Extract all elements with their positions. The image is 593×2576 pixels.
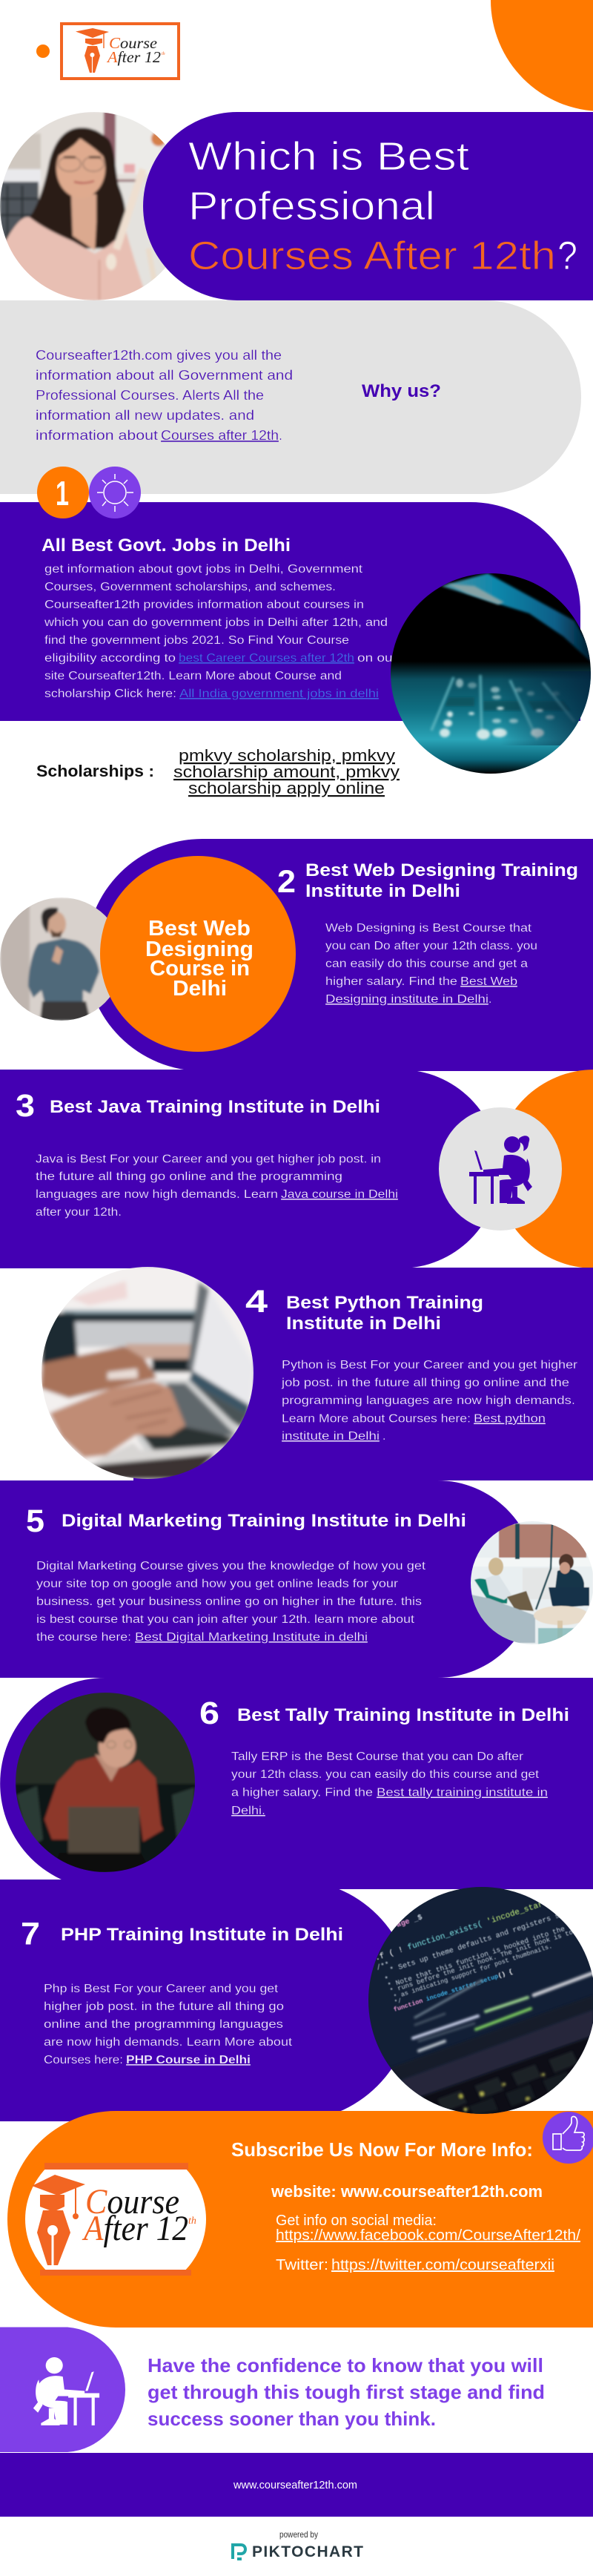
intro text <box>36 348 293 443</box>
body text: higher job post. in the future all thing go <box>44 2000 284 2013</box>
logo: Course After 12th: Course <box>109 34 157 52</box>
intro text: information about <box>36 428 158 443</box>
code text: * runs before the init hook. The init hook is too late <box>389 1921 593 1995</box>
body text: are now high demands. Learn More about <box>44 2036 293 2049</box>
photo: hands typing on laptop <box>41 1265 256 1483</box>
code text: */ <box>394 1997 402 2006</box>
code text: * <box>384 1975 391 1985</box>
why us label: Why us? <box>362 381 441 401</box>
photo: glowing laptop keyboard <box>391 573 593 774</box>
subscribe heading: Subscribe Us Now For More Info: <box>231 2138 533 2161</box>
photo: woman with laptop <box>15 1691 196 1874</box>
body text: Php is Best For your Career and you get <box>44 1983 279 1995</box>
panel: php <box>0 1880 413 2121</box>
decorative orange circle right <box>495 1070 593 1268</box>
cap and nib <box>32 2175 85 2265</box>
heading <box>286 1293 483 1334</box>
confidence message: get through this tough first stage and find <box>148 2381 545 2403</box>
orange dot <box>36 45 50 58</box>
body text: Java is Best For your Career and you get higher job post. in <box>36 1153 381 1166</box>
icon: light sun <box>89 467 141 518</box>
body text: job post. in the future all thing go online and the <box>281 1377 569 1389</box>
panel: digital marketing <box>0 1480 536 1678</box>
logo: large Course After 12th: After 12 <box>82 2209 188 2248</box>
body text: your 12th class. you can easily do this course and get <box>231 1768 540 1781</box>
code text: * Sets up theme defaults and registers support <box>389 1903 586 1975</box>
heading: All Best Govt. Jobs in Delhi <box>42 536 291 556</box>
panel: hero title <box>143 112 593 300</box>
circle caption: Course in <box>150 957 250 981</box>
code text: * Note that this function is hooked into the after <box>387 1917 590 1990</box>
website: website: www.courseafter12th.com <box>271 2182 543 2201</box>
confidence message: success sooner than you think. <box>148 2408 436 2430</box>
panel: confidence <box>0 2328 125 2452</box>
body text: . <box>382 1430 385 1443</box>
circle caption: Designing <box>145 938 254 961</box>
intro text: . <box>279 428 282 443</box>
body text: on our <box>357 652 398 665</box>
question mark: ? <box>557 234 577 278</box>
body text: Tally ERP is the Best Course that you can Do after <box>231 1750 524 1763</box>
logo: Course After 12th: th <box>162 52 165 56</box>
title line 3: Courses After 12th <box>188 234 556 278</box>
number 4: 4 <box>245 1284 268 1320</box>
panel: python <box>133 1268 593 1480</box>
scholarships links: scholarship apply online <box>188 779 385 797</box>
body text: institute in Delhi <box>282 1430 380 1443</box>
confidence message: Have the confidence to know that you will <box>148 2354 543 2376</box>
heading <box>305 860 578 901</box>
piktochart wordmark: PIKTOCHART <box>252 2543 363 2560</box>
body text: you can Do after your 12th class. you <box>325 940 537 952</box>
code text: function incode_starter_setup() { <box>393 1968 514 2014</box>
body text <box>281 1359 578 1443</box>
scholarships links: scholarship amount, pmkvy <box>173 762 400 781</box>
circle caption: Delhi <box>173 977 227 1001</box>
photo: man in denim shirt <box>0 897 110 1021</box>
body text: Courseafter12th provides information about courses in <box>44 599 364 611</box>
body text: eligibility according to <box>44 652 176 665</box>
icon: woman at desk <box>469 1136 532 1204</box>
body text: Python is Best For your Career and you get higher <box>282 1359 578 1371</box>
code text <box>377 1903 573 2012</box>
icon: piktochart mark <box>233 2545 245 2559</box>
number badge 1 <box>37 467 89 518</box>
logo: large Course After 12th <box>25 2163 206 2276</box>
body text: Delhi. <box>231 1805 265 1817</box>
heading: Institute in Delhi <box>305 881 460 901</box>
body text: Best Web <box>460 975 517 988</box>
panel: govt jobs <box>0 502 580 721</box>
number 5: 5 <box>26 1503 44 1539</box>
body text: can easily do this course and get a <box>325 958 528 970</box>
body text: higher salary. Find the <box>325 975 457 988</box>
intro text: Courseafter12th.com gives you all the <box>36 348 282 363</box>
body text: find the government jobs 2021. So Find Your Course <box>44 634 349 647</box>
number 3: 3 <box>16 1088 35 1124</box>
logo: Course After 12th <box>62 24 179 79</box>
panel: subscribe <box>7 2111 593 2328</box>
number 7: 7 <box>21 1917 40 1952</box>
decorative orange circle top right <box>491 0 593 111</box>
scholarships label: Scholarships : <box>36 762 154 780</box>
logo: Course After 12th: After 12 <box>106 48 162 66</box>
code text: age _$ <box>396 1913 424 1930</box>
heading: Best Java Training Institute in Delhi <box>50 1097 380 1117</box>
twitter: Twitter: <box>276 2257 328 2273</box>
body text: the future all thing go online and the programming <box>36 1170 342 1183</box>
social label: Get info on social media: <box>276 2213 437 2229</box>
scholarships links <box>173 746 400 797</box>
code text: .f ( ! function_exists( 'incode_starter_setup <box>374 1887 586 1963</box>
heading: Institute in Delhi <box>286 1314 441 1334</box>
body text: best Career Courses after 12th <box>179 652 354 665</box>
intro text: Professional Courses. Alerts All the <box>36 388 264 403</box>
body text: PHP Course in Delhi <box>126 2054 251 2066</box>
body text: scholarship Click here: <box>44 688 176 700</box>
body text: programming languages are now high demands. <box>282 1394 575 1407</box>
body text: Courses here: <box>44 2054 123 2066</box>
footer band <box>0 2453 593 2517</box>
code text: * as indicating support for post thumbnails. <box>393 1943 553 2001</box>
body text: . <box>488 993 491 1006</box>
title line 1: Which is Best <box>188 134 469 179</box>
photo: code on laptop screen <box>368 1887 593 2115</box>
body text: Java course in Delhi <box>281 1188 398 1201</box>
body text: which you can do government jobs in Delhi after 12th, and <box>44 616 388 629</box>
body text: online and the programming languages <box>44 2018 283 2031</box>
panel: java <box>0 1070 500 1268</box>
body text: is best course that you can join after your 12th. learn more about <box>36 1613 415 1626</box>
body text <box>231 1750 548 1817</box>
body text <box>36 1153 398 1219</box>
gray icon circle <box>439 1107 562 1231</box>
photo: two women in lounge <box>471 1521 593 1644</box>
body text: Best Digital Marketing Institute in delhi <box>135 1631 368 1644</box>
logo: large Course After 12th: th <box>188 2216 196 2227</box>
panel: web designing <box>86 839 593 1071</box>
body text <box>36 1560 426 1644</box>
body text: business. get your business online go on higher in the future. this <box>36 1595 422 1608</box>
intro text: Courses after 12th <box>161 428 279 443</box>
title line 2: Professional <box>188 184 435 228</box>
body text: Web Designing is Best Course that <box>325 922 532 935</box>
confidence message <box>148 2354 545 2430</box>
orange circle <box>100 856 296 1052</box>
body text: your site top on google and how you get online leads for your <box>36 1578 399 1590</box>
intro text: information about all Government and <box>36 368 293 383</box>
circle caption <box>145 917 254 1001</box>
heading: Best Web Designing Training <box>305 860 578 880</box>
logo wordmark: Course <box>85 2182 179 2221</box>
twitter: https://twitter.com/courseafterxii <box>331 2257 554 2273</box>
facebook link: https://www.facebook.com/CourseAfter12th/ <box>276 2227 580 2244</box>
body text: Learn More about Courses here: <box>282 1412 471 1426</box>
powered by label: powered by <box>279 2529 318 2540</box>
body text: languages are now high demands. Learn <box>36 1188 278 1201</box>
footer band: www.courseafter12th.com <box>233 2479 357 2491</box>
body text <box>325 922 537 1006</box>
body text <box>44 563 398 700</box>
body text: a higher salary. Find the <box>231 1786 373 1799</box>
photo: smiling student <box>0 112 166 300</box>
body text: get information about govt jobs in Delhi, Government <box>44 563 363 576</box>
body text: site Courseafter12th. Learn More about Course and <box>44 670 342 682</box>
body text: Designing institute in Delhi <box>325 993 488 1006</box>
number badge 1: 1 <box>56 474 69 513</box>
intro text: information all new updates. and <box>36 408 254 423</box>
body text: after your 12th. <box>36 1206 122 1219</box>
icon: thumbs up <box>543 2112 593 2164</box>
heading: PHP Training Institute in Delhi <box>61 1925 343 1945</box>
heading: Best Tally Training Institute in Delhi <box>237 1705 569 1725</box>
body text: Best tally training institute in <box>377 1786 548 1799</box>
body text: Digital Marketing Course gives you the knowledge of how you get <box>36 1560 426 1572</box>
body text <box>44 1983 293 2066</box>
panel: tally <box>0 1678 593 1889</box>
heading: Best Python Training <box>286 1293 483 1313</box>
body text: the course here: <box>36 1631 131 1644</box>
icon: person at desk <box>33 2357 99 2425</box>
white logo backdrop <box>25 2170 206 2270</box>
heading: Digital Marketing Training Institute in Delhi <box>62 1511 466 1531</box>
code text: /** <box>376 1960 391 1973</box>
body text: Courses, Government scholarships, and schemes. <box>44 581 336 593</box>
number 6: 6 <box>199 1696 219 1731</box>
panel: why us <box>0 300 581 494</box>
number 2: 2 <box>277 864 296 900</box>
body text: Best python <box>474 1412 546 1426</box>
body text: All India government jobs in delhi <box>179 688 379 700</box>
circle caption: Best Web <box>148 917 251 941</box>
scholarships links: pmkvy scholarship, pmkvy <box>179 746 395 765</box>
